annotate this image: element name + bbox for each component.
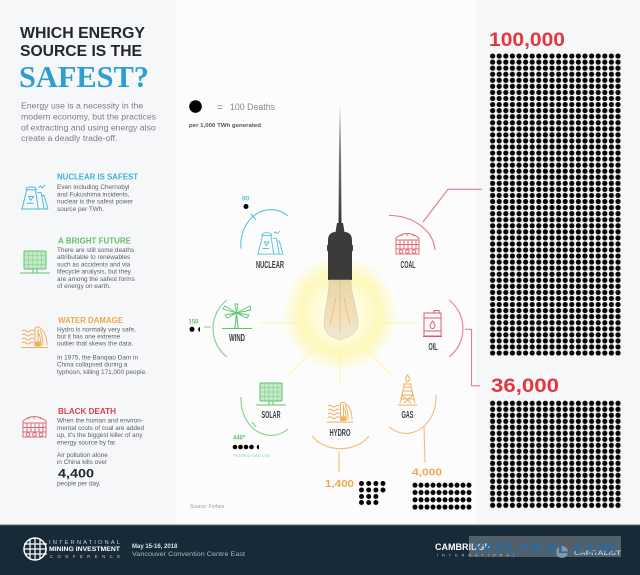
panel: black death: people per day. xyxy=(57,480,101,488)
panel: black death xyxy=(23,407,144,488)
intro paragraph xyxy=(21,100,157,143)
panel: black death: mental costs of coal are added xyxy=(57,425,144,432)
hydro arc and connector xyxy=(312,436,369,472)
cord xyxy=(338,105,342,225)
panel: a bright future: lifecycle analysis, but they xyxy=(57,269,132,276)
intro paragraph: create a deadly trade-off. xyxy=(21,133,117,143)
panel: black death: energy source by far. xyxy=(57,439,117,446)
coal dot grid xyxy=(489,53,621,356)
panel: nuclear is safest: nuclear is the safest power xyxy=(57,199,134,206)
oil group xyxy=(423,300,480,386)
source: Source: Forbes xyxy=(190,504,225,510)
solar group xyxy=(233,383,288,458)
panel: a bright future: There are still some deaths xyxy=(57,247,134,254)
panel: black death: in China kills over xyxy=(57,459,108,466)
panel: water damage xyxy=(21,316,147,376)
panel: nuclear is safest: NUCLEAR IS SAFEST xyxy=(57,172,138,182)
intro paragraph: modern economy, but the practices xyxy=(21,112,157,122)
conference logo: CONFERENCE xyxy=(50,554,120,559)
footer bar xyxy=(0,524,640,575)
coal group xyxy=(389,189,482,271)
panel: black death: When the human and environ- xyxy=(57,418,143,425)
sponsor logos xyxy=(435,542,621,558)
icon: globe xyxy=(24,538,47,560)
panel: black death: Air pollution alone xyxy=(57,452,108,459)
wind group: WIND xyxy=(229,332,245,344)
panel: black death: up, it's the biggest killer of any xyxy=(57,432,143,439)
panel: a bright future: attributable to renewables xyxy=(57,254,130,261)
event details: May 15-16, 2018 xyxy=(132,544,178,550)
icon: nuclear plant xyxy=(21,185,48,209)
gas group: GAS xyxy=(402,409,414,421)
panel: water damage: China collapsed during a xyxy=(57,362,128,368)
icon: hydro dam xyxy=(21,327,48,348)
sponsor logos: CAPITALIST xyxy=(574,551,621,557)
panel: a bright future: of energy on earth. xyxy=(57,283,111,290)
watermark xyxy=(469,536,621,557)
panel: nuclear is safest: source per TWh. xyxy=(57,206,104,213)
sponsor logos: INTERNATIONAL xyxy=(437,554,515,558)
coal arc and connector xyxy=(389,189,482,250)
conference logo: MINING INVESTMENT xyxy=(49,546,120,553)
panel: a bright future xyxy=(20,236,135,290)
panel: a bright future: A BRIGHT FUTURE xyxy=(58,236,132,246)
gas arc and connector xyxy=(389,395,436,463)
hydro value: 1,400 xyxy=(325,479,355,490)
gas group xyxy=(389,375,472,511)
light bulb on cord xyxy=(324,105,358,340)
title: WHICH ENERGY xyxy=(20,25,146,42)
event details xyxy=(132,544,245,558)
legend: dot equals 100 deaths: 100 Deaths xyxy=(230,102,276,112)
title: SAFEST? xyxy=(19,59,149,94)
icon: hydro xyxy=(327,402,353,422)
icon: nuclear xyxy=(257,231,283,254)
panel: a bright future: such as accidents and via xyxy=(57,262,131,268)
icon: coal xyxy=(396,234,419,254)
wind arc xyxy=(204,300,227,357)
oil arc and connector xyxy=(449,300,480,386)
panel: water damage: outlier that skews the data. xyxy=(57,341,133,348)
gas dots xyxy=(412,482,472,511)
gas value: 4,000 xyxy=(412,468,443,478)
bulb xyxy=(324,280,358,340)
hydro dots xyxy=(359,481,386,505)
nuclear group xyxy=(241,196,288,271)
solar arc xyxy=(241,397,288,435)
panel: black death: 4,400 xyxy=(58,466,94,480)
oil dot grid xyxy=(489,400,621,508)
event details: Vancouver Convention Centre East xyxy=(132,552,245,558)
oil value: 36,000 xyxy=(491,375,559,397)
icon: solar xyxy=(256,383,286,405)
title xyxy=(19,25,149,94)
panel: water damage: Hydro is normally very safe, xyxy=(57,326,136,334)
icon: solar panel xyxy=(20,251,50,273)
panel: water damage: but it has one extreme xyxy=(57,334,121,340)
sponsor logos: CAMBRIDGE xyxy=(435,542,490,552)
icon: wind xyxy=(222,304,252,328)
solar group: SOLAR xyxy=(262,409,281,421)
socket xyxy=(327,223,353,280)
solar group: *Rooftop solar only xyxy=(233,453,271,458)
conference logo xyxy=(24,538,121,560)
conference logo: INTERNATIONAL xyxy=(49,540,121,546)
panel: a bright future: are among the safest forms xyxy=(57,276,135,283)
panel: nuclear is safest: and Fukushima incidents, xyxy=(57,191,130,198)
panel: nuclear is safest xyxy=(21,172,138,213)
intro paragraph: of extracting and using energy also xyxy=(21,122,156,132)
legend: dot equals 100 deaths: per 1,000 TWh generated xyxy=(189,123,261,129)
icon: gas xyxy=(398,375,417,405)
nuclear value: 90 xyxy=(242,196,250,202)
watermark: YAPLAKAL.COM xyxy=(472,540,616,557)
oil group: OIL xyxy=(428,341,438,353)
legend: dot equals 100 deaths xyxy=(189,100,276,129)
panel: nuclear is safest: Even including Chernobyl xyxy=(57,184,129,191)
wind value: 150 xyxy=(188,320,199,326)
title: SOURCE IS THE xyxy=(20,43,142,60)
solar value: 440* xyxy=(233,436,246,442)
panel: water damage: WATER DAMAGE xyxy=(58,316,124,325)
nuclear group: NUCLEAR xyxy=(256,259,284,271)
center white panel xyxy=(176,0,476,525)
legend: dot equals 100 deaths: = xyxy=(217,102,223,113)
nuclear arc xyxy=(241,210,288,248)
hydro group xyxy=(312,402,386,505)
hydro group: HYDRO xyxy=(330,427,350,439)
coal value: 100,000 xyxy=(489,29,565,51)
panel: water damage: In 1975, the Banqiao Dam in xyxy=(57,354,138,362)
intro paragraph: Energy use is a necessity in the xyxy=(21,100,143,110)
panel: black death: BLACK DEATH xyxy=(58,407,116,416)
icon: coal wagon xyxy=(23,416,46,437)
coal group: COAL xyxy=(400,259,416,271)
icon: oil xyxy=(423,310,442,336)
wind group xyxy=(188,300,252,357)
panel: water damage: typhoon, killing 171,000 people. xyxy=(57,369,147,376)
light glow and rays xyxy=(260,256,420,385)
